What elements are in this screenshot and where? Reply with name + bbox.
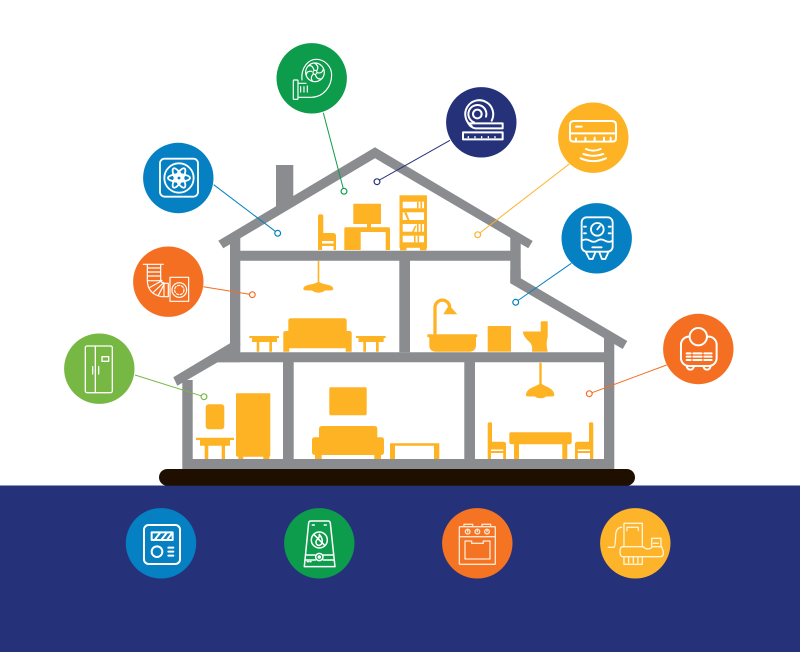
house cross-section [173, 147, 627, 469]
refrigerator silhouette [236, 393, 270, 459]
leader line: refrigerator [135, 375, 207, 400]
furniture [196, 195, 593, 459]
icon: carbon monoxide detector [284, 508, 354, 578]
centre room sofa [312, 426, 384, 459]
icon: insulation roll [446, 87, 516, 158]
leader line: dryer duct [203, 287, 255, 298]
main roof [218, 147, 533, 248]
leader line: insulation [374, 140, 450, 185]
icon: atom fan in square [143, 143, 214, 213]
living room lamp [303, 261, 333, 293]
icon: refrigerator [64, 334, 134, 404]
living room right side table [356, 336, 386, 352]
attic desk [344, 227, 390, 250]
leader line: water heater [513, 263, 571, 305]
dining room lamp [526, 363, 554, 398]
icon: ventilation blower [276, 43, 347, 113]
lower storey walls and floors [182, 334, 614, 469]
kitchen table [196, 438, 234, 459]
leader line: furnace [586, 365, 667, 397]
left lower roof [173, 343, 240, 386]
leader line: air conditioner [475, 164, 569, 238]
leader line: exhaust fan [214, 185, 281, 236]
dining table [509, 432, 572, 459]
right lower roof [510, 270, 627, 349]
attic monitor [353, 204, 381, 228]
icon: sump pump [600, 508, 670, 578]
icon: oven [442, 508, 512, 578]
leader line: ventilation fan [323, 113, 347, 194]
icon: water heater [562, 203, 632, 274]
dining chair right [575, 422, 593, 459]
upper storey walls and floors [230, 234, 521, 352]
living room sofa [283, 318, 352, 352]
bookshelf [400, 195, 427, 250]
wall picture [329, 387, 367, 415]
living room left side table [249, 336, 279, 352]
foundation slab [159, 469, 635, 486]
chimney [276, 165, 293, 208]
kitchen wall cabinet [206, 404, 224, 429]
dining chair left [488, 422, 506, 459]
bathroom cabinet [488, 326, 511, 352]
attic chair [318, 214, 336, 250]
coffee table [390, 443, 439, 459]
icon: duct and dryer [133, 247, 204, 317]
navy ground band [0, 486, 800, 652]
icon: thermostat meter [126, 508, 196, 578]
icon: furnace unit [663, 314, 734, 384]
bathtub and shower [427, 300, 477, 352]
toilet [523, 321, 548, 352]
icon: air conditioner [558, 102, 628, 173]
